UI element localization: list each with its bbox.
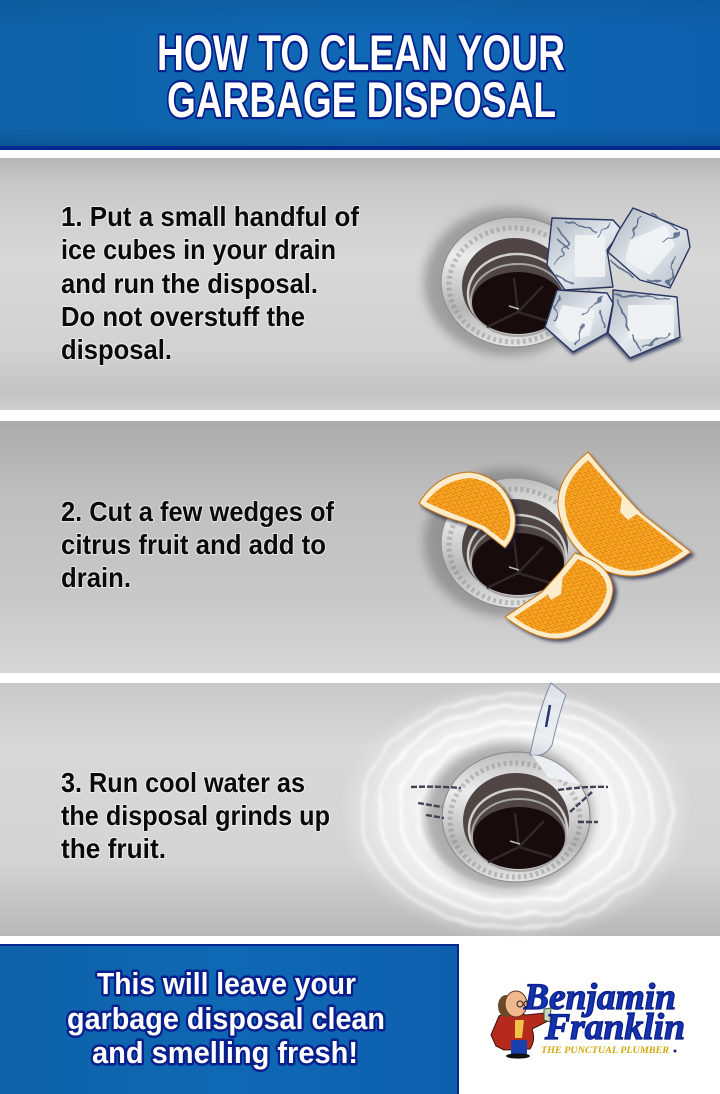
step 1 text bbox=[61, 201, 360, 365]
logo: Benjamin Franklin bbox=[491, 977, 685, 1059]
footer text bbox=[67, 966, 385, 1070]
step 3 text bbox=[61, 767, 330, 864]
icon: drain with running water and ripples bbox=[338, 682, 694, 942]
logo: Benjamin Franklin: Franklin bbox=[544, 1007, 685, 1048]
step 1 text: and run the disposal. bbox=[61, 268, 318, 299]
icon: drain with orange wedges bbox=[419, 452, 695, 642]
icon: Ben Franklin mascot bbox=[491, 991, 551, 1059]
step 1 text: 1. Put a small handful of bbox=[61, 201, 360, 232]
footer text: This will leave your bbox=[97, 966, 356, 1001]
step 3 text: 3. Run cool water as bbox=[61, 767, 305, 798]
panel: step 2 bbox=[0, 421, 720, 673]
step 1 text: ice cubes in your drain bbox=[61, 234, 336, 265]
step 2 text: citrus fruit and add to bbox=[61, 529, 326, 560]
panel: step 3 bbox=[0, 682, 720, 942]
logo: Benjamin Franklin: Benjamin bbox=[523, 977, 676, 1018]
panel: step 1 bbox=[0, 158, 720, 410]
title: GARBAGE DISPOSAL bbox=[167, 72, 556, 128]
footer text: and smelling fresh! bbox=[92, 1035, 358, 1070]
title bbox=[157, 25, 565, 128]
panel: footer message bbox=[0, 944, 459, 1094]
step 2 text: 2. Cut a few wedges of bbox=[61, 496, 335, 527]
icon: drain with ice cubes bbox=[424, 208, 690, 361]
step 1 text: Do not overstuff the bbox=[61, 301, 305, 332]
logo: Benjamin Franklin: THE PUNCTUAL PLUMBER bbox=[541, 1046, 669, 1056]
header banner bbox=[0, 0, 720, 150]
step 3 text: the disposal grinds up bbox=[61, 800, 330, 831]
step 3 text: the fruit. bbox=[61, 833, 166, 864]
step 1 text: disposal. bbox=[61, 334, 172, 365]
footer text: garbage disposal clean bbox=[67, 1001, 385, 1036]
step 2 text bbox=[61, 496, 335, 593]
step 2 text: drain. bbox=[61, 562, 131, 593]
title: HOW TO CLEAN YOUR bbox=[157, 25, 565, 81]
